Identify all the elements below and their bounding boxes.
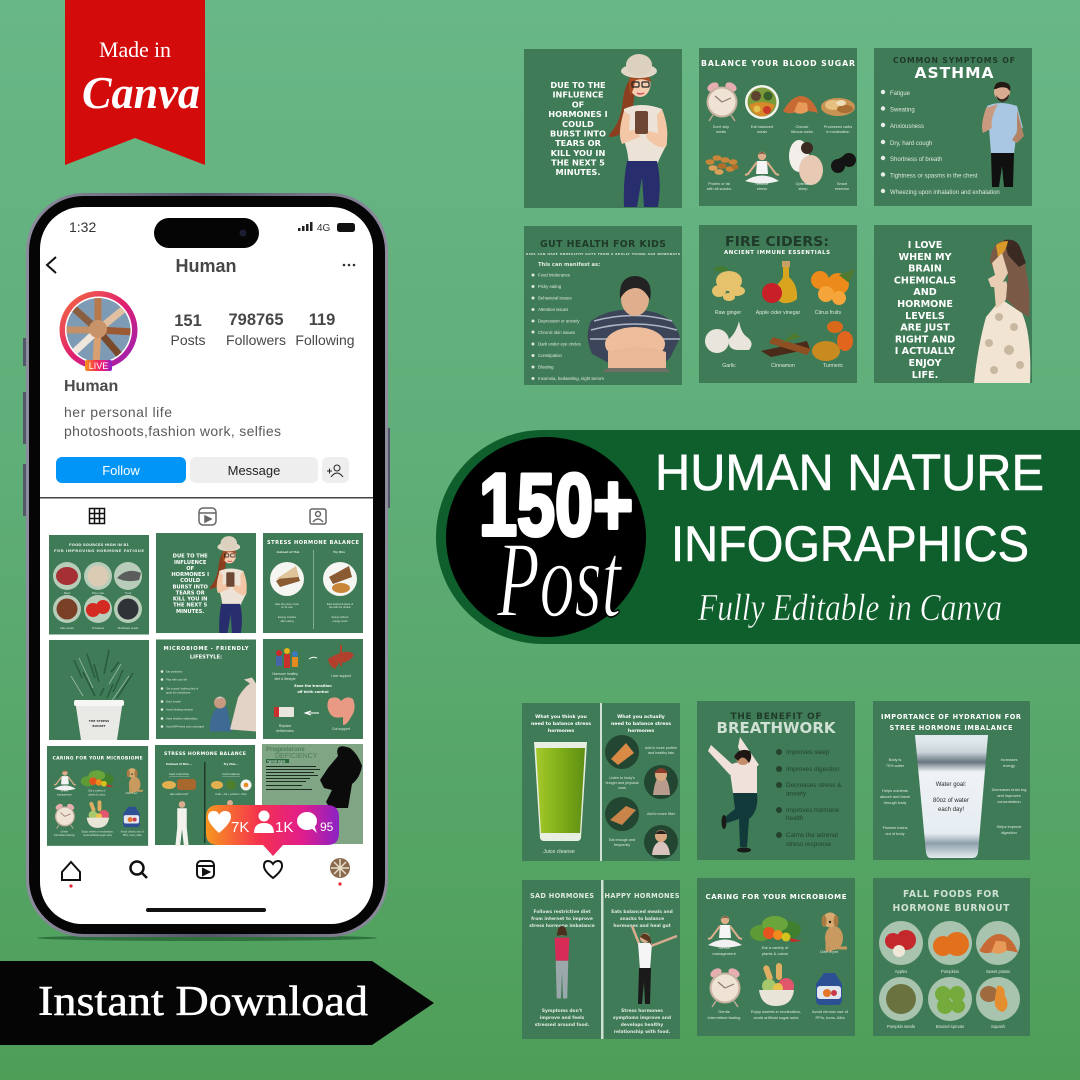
card: sad vs happy hormones: SAD HORMONES (530, 892, 594, 900)
card: sad vs happy hormones: HAPPY HORMONES (604, 892, 680, 900)
card: fire ciders: Apple cider vinegar (756, 310, 800, 316)
post: hormone healthy transition: Replace (279, 724, 291, 728)
instant download arrow (0, 961, 434, 1045)
card: symptoms of asthma: ASTHMA (914, 64, 994, 82)
post: caring for your microbiome: Eat a variety of (88, 788, 106, 792)
profile stats: Followers (226, 332, 286, 348)
post: food sources: Beef (64, 591, 70, 595)
card: caring for your microbiome: Avoid chronic use of (812, 1009, 849, 1014)
card: think vs actually need: Add in more fiber (647, 812, 676, 816)
post: food sources: Flax seeds (60, 626, 74, 630)
follow button: Follow (102, 463, 140, 478)
card: caring for your microbiome: plants & colors (762, 951, 788, 956)
post: hormones quote: OF (186, 566, 195, 572)
card: gut health for kids: KIDS CAN HAVE UNHEALTHY GUTS FROM A REALLY YOUNG AGE NOWADAYS (526, 252, 680, 256)
card: symptoms of asthma: Wheezing upon inhalation and exhalation (890, 190, 1000, 196)
card: balance your blood sugar: meals (716, 130, 726, 134)
post: progesterone deficiency: DEFICIENCY (275, 753, 318, 760)
post: progesterone deficiency (262, 744, 363, 844)
card: importance of hydration: IMPORTANCE OF HYDRATION FOR (881, 713, 1021, 721)
card: balance your blood sugar: BALANCE YOUR BLOOD SUGAR (701, 59, 855, 68)
card: think vs actually need: hormones (548, 728, 574, 734)
card: hormones quote: OF (572, 99, 584, 109)
stats bubble (206, 805, 339, 856)
card: gut health for kids: Dark under eye circles (538, 342, 581, 346)
post: caring for your microbiome: Enjoy sweets in moderation, (82, 829, 114, 833)
card: I love when my brain chemicals: ARE JUST (900, 323, 950, 334)
card: importance of hydration: out of body (885, 831, 905, 836)
heading (655, 444, 1044, 572)
post: food sources: Pine nuts (92, 591, 104, 595)
card: symptoms of asthma: Dry, hard cough (890, 141, 932, 147)
card: fire ciders: Garlic (722, 363, 736, 369)
card: hormones quote: KILL YOU IN (551, 148, 605, 158)
card: sad vs happy hormones: stressed around food. (535, 1022, 590, 1028)
card: think vs actually need: need to balance stress (611, 721, 671, 727)
post: caring for your microbiome: Gentle (61, 829, 69, 833)
post: stress hormone balance: energy crash (332, 619, 348, 623)
card: fall foods: Pumpkin seeds (887, 1024, 915, 1029)
stats bubble: 7K (231, 819, 249, 836)
card: caring for your microbiome: Enjoy sweets in moderation, (751, 1009, 801, 1014)
card: sad vs happy hormones: Stress hormones (621, 1008, 663, 1014)
card: I love when my brain chemicals: AND (913, 287, 937, 298)
badge: 150+ Post: Post (496, 521, 623, 640)
card: balance your blood sugar: with all snacks (707, 187, 731, 191)
card: think vs actually need: hunger and physical (605, 781, 639, 785)
card: fall foods (873, 878, 1030, 1036)
post: progesterone deficiency: Typical signs (267, 760, 286, 764)
post: microbiome friendly: Eat probiotics (166, 670, 183, 674)
add person button (322, 457, 349, 483)
post: hormones quote: DUE TO THE (173, 554, 208, 560)
card: fall foods: Brussel sprouts (936, 1024, 964, 1029)
card: importance of hydration: Water goal: (936, 782, 967, 788)
card: gut health for kids: Attention issues (538, 307, 568, 312)
heading: HUMAN NATURE (655, 444, 1044, 501)
post: hormone healthy transition: off birth control (297, 690, 329, 694)
post: hormones quote: BURST INTO (172, 584, 208, 590)
card: hormones quote: MINUTES. (556, 167, 600, 177)
card: fall foods: FALL FOODS FOR (903, 889, 999, 900)
card: I love when my brain chemicals: RIGHT AND (895, 334, 955, 345)
badge: 150+ Post: 150+ (479, 455, 633, 554)
post: hormone healthy transition: Liver support (331, 674, 351, 678)
post: hormones quote: INFLUENCE (174, 560, 207, 566)
post: stress hormone balance: STRESS HORMONE BALANCE (267, 540, 360, 546)
profile stats: Posts (170, 332, 206, 348)
post: stress hormone balance: Try this (333, 550, 345, 554)
card: benefit of breathwork: anxiety (786, 790, 807, 798)
post: caring for your microbiome: plants & colors (89, 792, 106, 796)
card: importance of hydration: concentration (997, 799, 1021, 804)
post: microbiome friendly: Avoid inhaling exhaust (166, 708, 193, 712)
status bar: 1:32 (69, 219, 96, 235)
profile header (47, 256, 355, 276)
card: symptoms of asthma: Sweating (890, 108, 915, 114)
card: balance your blood sugar: Smart (837, 182, 848, 186)
card: think vs actually need: hormones (628, 728, 654, 734)
post: food sources: Trout (125, 591, 131, 595)
post: stress hormone balance 2: Try this... (224, 762, 238, 766)
card: hormones quote: INFLUENCE (552, 90, 604, 100)
card: caring for your microbiome: Stress (718, 945, 730, 950)
card: benefit of breathwork (697, 701, 855, 860)
card: symptoms of asthma: COMMON SYMPTOMS OF (893, 56, 1015, 65)
card: importance of hydration: Decreases brain fog (992, 787, 1026, 792)
card: fall foods: Pumpkins (941, 969, 959, 974)
card: importance of hydration: Body is (889, 757, 901, 762)
home indicator (146, 908, 266, 912)
card: importance of hydration: Flushes toxins (883, 825, 907, 830)
card: symptoms of asthma: Tightness or spasms in the chest (890, 174, 978, 180)
card: importance of hydration: Helps nutrients (882, 788, 908, 793)
title banner (436, 430, 1080, 644)
card: balance your blood sugar: Choose (795, 125, 809, 129)
card: I love when my brain chemicals: WHEN MY (898, 252, 953, 263)
card: fire ciders: Turmeric (823, 363, 844, 369)
card: think vs actually need: cues (618, 786, 626, 790)
heading: INFOGRAPHICS (671, 516, 1029, 572)
card: think vs actually need: and healthy fats (648, 751, 674, 755)
card: benefit of breathwork: stress response (786, 841, 832, 848)
card: symptoms of asthma (874, 48, 1032, 206)
card: sad vs happy hormones: stress hormone imbalance (529, 923, 595, 929)
card: hormones quote: COULD (562, 119, 594, 129)
card: importance of hydration: each day! (938, 807, 964, 813)
card: think vs actually need: Listen to body's (609, 776, 635, 780)
post: microbiome friendly: Get a good, bathing dirty is (166, 686, 199, 690)
card: gut health for kids: Depression or anxiety (538, 318, 580, 324)
card: importance of hydration: STREE HORMONE IMBALANCE (890, 724, 1013, 732)
post: hormone healthy transition: Hormone healthy (272, 672, 298, 676)
card: importance of hydration: 80oz of water (933, 798, 969, 804)
post: stress hormone balance 2: Carb restriction (169, 772, 189, 776)
message button: Message (228, 463, 280, 478)
post: stress hormone balance: Instead of this (277, 550, 300, 554)
post: progesterone deficiency: Progesterone (266, 747, 305, 753)
profile bio (64, 378, 281, 439)
card: balance your blood sugar: Reduce (755, 182, 769, 186)
card: fire ciders: Cinnamon (771, 363, 795, 369)
card: fire ciders: ANCIENT IMMUNE ESSENTIALS (724, 250, 830, 256)
card: think vs actually need: What you actually (617, 714, 665, 720)
post: caring for your microbiome: management (57, 792, 72, 796)
card: I love when my brain chemicals: I ACTUALLY (895, 346, 956, 357)
post: stress hormone balance 2: Carb + fat + protein + fiber (215, 792, 247, 796)
card: fall foods: Squash (991, 1024, 1006, 1029)
profile bio: Human (64, 378, 118, 395)
card: I love when my brain chemicals: LEVELS (905, 311, 945, 322)
profile bio: her personal life (64, 404, 172, 420)
card: importance of hydration: Increases (1001, 757, 1017, 762)
ribbon: Made in Canva: Canva (82, 68, 200, 118)
post: food sources: FOOD SOURCES HIGH IN B1 (69, 542, 129, 547)
follow button (56, 457, 186, 483)
post: stress bucket: BUCKET (92, 724, 107, 728)
profile stats: 798765 (228, 311, 284, 329)
profile stats: 119 (309, 311, 335, 329)
card: benefit of breathwork: BREATHWORK (716, 719, 837, 737)
post: microbiome friendly: Have healthy relationships (166, 716, 198, 720)
post: hormone healthy transition (263, 639, 363, 739)
card: caring for your microbiome: management (712, 951, 737, 956)
card: hormones quote: TEARS OR (555, 138, 602, 148)
card: balance your blood sugar: sleep (798, 187, 808, 191)
card: sad vs happy hormones: relationship with food. (614, 1029, 671, 1035)
card: fire ciders: Raw ginger (715, 310, 741, 316)
card: hormones quote: THE NEXT 5 (551, 158, 605, 168)
card: think vs actually need: Eat enough and (609, 838, 635, 842)
stats bubble: 1K (275, 819, 293, 836)
card: I love when my brain chemicals: CHEMICALS (894, 275, 956, 286)
post: hormone healthy transition: diet & lifestyle (275, 677, 296, 681)
card: sad vs happy hormones: symptoms improve and (613, 1015, 671, 1021)
card: gut health for kids: Behavioral issues (538, 296, 572, 300)
card: importance of hydration: absorb and travel (880, 794, 910, 799)
card: think vs actually need: need to balance stress (531, 721, 591, 727)
card: symptoms of asthma: Shortness of breath (890, 157, 942, 163)
card: fire ciders (699, 225, 857, 383)
card: I love when my brain chemicals: LIFE. (912, 370, 938, 381)
card: caring for your microbiome: avoid artificial sugar subs (754, 1015, 798, 1020)
card: caring for your microbiome: CARING FOR YOUR MICROBIOME (706, 893, 847, 901)
card: balance your blood sugar (699, 48, 857, 206)
card: balance your blood sugar: meals (757, 130, 767, 134)
card: hormones quote: DUE TO THE (550, 80, 606, 90)
post: caring for your microbiome: intermittent fasting (54, 833, 75, 837)
post: caring for your microbiome: Stress (61, 788, 69, 792)
panel: top preview cards (524, 48, 1032, 385)
card: gut health for kids: Picky eating (538, 284, 562, 289)
card: I love when my brain chemicals: ENJOY (909, 358, 943, 369)
card: importance of hydration: and improves (997, 793, 1021, 798)
post: stress hormone balance: after eating (281, 619, 294, 623)
card: gut health for kids: This can manifest as: (538, 262, 600, 268)
card: I love when my brain chemicals: I LOVE (908, 240, 942, 251)
card: gut health for kids: Insomnia, bedwetting, night terrors (538, 376, 604, 381)
post: hormones quote: HORMONES I (171, 572, 209, 578)
subheading: Fully Editable in Canva (697, 587, 1002, 629)
post: stress hormone balance: Eats dry piece of pie (275, 602, 299, 606)
card: fire ciders: FIRE CIDERS: (725, 235, 829, 250)
profile bio: photoshoots,fashion work, selfies (64, 423, 281, 439)
post: microbiome friendly: Don't smoke (166, 700, 181, 704)
card: importance of hydration (873, 701, 1030, 860)
post: stress hormone balance: Eats preferred piece of (327, 602, 353, 606)
card: fall foods: HORMONE BURNOUT (892, 903, 1010, 914)
post: microbiome friendly: Avoid BPA-lined cans and paper (166, 724, 205, 728)
post: food sources: FOR IMPROVING HORMONE FATIGUE (54, 548, 144, 553)
post: stress hormone balance 2: Has carbs lost? (170, 792, 189, 796)
card: sad vs happy hormones: Follows restrictive diet (534, 909, 590, 915)
tab icons (90, 508, 326, 525)
post: microbiome friendly: MICROBIOME - FRIENDLY (164, 646, 249, 652)
card: hormones quote (524, 49, 682, 208)
post: caring for your microbiome: Own a pet (126, 791, 138, 795)
post: hormones quote: TEARS OR (176, 590, 205, 596)
phone mockup (23, 193, 390, 941)
card: benefit of breathwork: Improves digestion (786, 766, 840, 773)
card: sad vs happy hormones: snacks to balance (620, 916, 664, 922)
card: caring for your microbiome: intermittent fasting (708, 1015, 740, 1020)
status bar (69, 218, 355, 248)
card: caring for your microbiome: Eat a variety of (762, 945, 789, 950)
card: sad vs happy hormones: Eats balanced meals and (611, 909, 673, 915)
card: balance your blood sugar: Eat balanced (751, 125, 773, 129)
card: fall foods: Apples (895, 969, 907, 974)
post: stress hormone balance: Enjoys without (332, 615, 349, 619)
card: benefit of breathwork: Calms the adrenal (786, 832, 838, 839)
card: balance your blood sugar: Protein or fat (708, 182, 731, 186)
post: stress bucket: THE STRESS (89, 719, 109, 723)
post: stress hormone balance 2: Instead of this... (166, 762, 192, 766)
post: hormones quote: COULD (180, 578, 201, 584)
post: stress hormone balance 2 (155, 745, 255, 846)
post: hormones quote (156, 533, 256, 633)
card: balance your blood sugar: in moderation (826, 130, 850, 134)
card: balance your blood sugar: stress (757, 187, 767, 191)
card: balance your blood sugar: Don't skip (713, 125, 729, 129)
avatar with live badge: LIVE (89, 361, 108, 371)
post: stress hormone balance: pie with the protein (329, 605, 351, 609)
card: benefit of breathwork: Improves hormone (786, 807, 840, 814)
card: fire ciders: Citrus fruits (815, 310, 842, 316)
ribbon: Made in Canva: Made in (99, 37, 171, 62)
card: think vs actually need: Juice cleanse (543, 849, 575, 855)
card: I love when my brain chemicals: HORMONE (897, 299, 953, 310)
post: hormone healthy transition: Ease the transition (294, 684, 332, 688)
card: gut health for kids: Constipation (538, 353, 562, 358)
card: symptoms of asthma: Anxiousness (890, 124, 924, 130)
card: gut health for kids: Chronic skin issues (538, 330, 575, 335)
card: I love when my brain chemicals (874, 225, 1032, 383)
post: hormones quote: THE NEXT 5 (173, 603, 208, 609)
status bar: 4G (317, 223, 331, 234)
post: microbiome friendly: Play with your dirt (166, 678, 187, 682)
card: importance of hydration: through body (884, 800, 906, 805)
panel: bottom preview cards (522, 701, 1030, 1039)
profile stats (170, 311, 355, 348)
post: hormones quote: MINUTES. (176, 609, 204, 615)
profile header: Human (175, 256, 237, 276)
post: caring for your microbiome: Avoid chronic use of (121, 829, 144, 833)
card: think vs actually need: What you think you (535, 714, 587, 720)
card: sad vs happy hormones: hormones and heal gut (613, 923, 671, 929)
post: food sources: Tomatoes (92, 626, 105, 630)
post: hormone healthy transition: deficiencies (276, 729, 294, 733)
post: caring for your microbiome: CARING FOR YOUR MICROBIOME (52, 755, 143, 761)
card: balance your blood sugar: exercise (835, 187, 849, 191)
card: benefit of breathwork: THE BENEFIT OF (730, 712, 822, 722)
card: caring for your microbiome (697, 878, 855, 1036)
card: hormones quote: BURST INTO (550, 128, 606, 138)
card: benefit of breathwork: Improves sleep (786, 749, 830, 756)
avatar with live badge (60, 291, 138, 371)
stats bubble: 95 (320, 820, 334, 834)
post: stress hormone balance 2: Carb balance (222, 772, 240, 776)
post: caring for your microbiome: avoid artificial sugar subs (83, 833, 113, 837)
ribbon: Made in Canva (65, 0, 205, 165)
card: benefit of breathwork: health (786, 815, 804, 822)
post: stress hormone balance: Energy crashes (278, 615, 297, 619)
card: caring for your microbiome: PPIs, tums, Alka (815, 1015, 845, 1020)
card: importance of hydration: energy (1003, 763, 1015, 768)
card: sad vs happy hormones: improve and feels (540, 1015, 585, 1021)
card: caring for your microbiome: Gentle (718, 1009, 731, 1014)
post: microbiome friendly (156, 640, 256, 739)
card: sad vs happy hormones: Symptoms don't (542, 1008, 582, 1014)
post: stress bucket (49, 640, 149, 740)
instant download arrow: Instant Download (38, 979, 368, 1025)
post: microbiome friendly: good for microbiome (166, 690, 191, 694)
card: gut health for kids (524, 226, 682, 385)
card: importance of hydration: Helps improve (997, 824, 1021, 829)
post: stress hormone balance (263, 533, 363, 633)
card: gut health for kids: Food intolerance (538, 272, 571, 278)
card: balance your blood sugar: Optimize (796, 182, 810, 186)
card: think vs actually need: Add in more protein (645, 746, 677, 750)
post: stress hormone balance: on its own (281, 605, 293, 609)
card: fall foods: Sweet potato (986, 969, 1011, 974)
badge: 150+ Post (446, 437, 646, 640)
message button (190, 457, 318, 483)
card: sad vs happy hormones: develops healthy (621, 1022, 663, 1028)
card: caring for your microbiome: Own a pet (820, 949, 839, 954)
card: hormones quote: HORMONES I (548, 109, 608, 119)
post: caring for your microbiome: PPIs, tums, Alka (123, 833, 142, 837)
card: balance your blood sugar: fibrous carbs (791, 130, 813, 134)
card: I love when my brain chemicals: BRAIN (908, 264, 942, 275)
post: food sources: Sunflower seeds (118, 626, 139, 630)
post: caring for your microbiome (47, 746, 148, 846)
post: hormones quote: KILL YOU IN (173, 597, 208, 603)
banner background (436, 430, 1080, 644)
card: think vs actually need (522, 703, 680, 861)
card: balance your blood sugar: Processed carbs (824, 125, 852, 129)
card: symptoms of asthma: Fatigue (890, 91, 911, 97)
post: stress hormone balance 2: STRESS HORMONE BALANCE (164, 751, 246, 757)
card: importance of hydration: 70% water (886, 763, 905, 768)
card: gut health for kids: Bloating (538, 364, 554, 370)
profile stats: 151 (174, 312, 202, 330)
card: importance of hydration: digestion (1001, 830, 1017, 835)
card: sad vs happy hormones (522, 880, 680, 1039)
profile stats: Following (295, 332, 355, 348)
post: microbiome friendly: LIFESTYLE: (190, 654, 222, 660)
card: gut health for kids: GUT HEALTH FOR KIDS (540, 239, 666, 250)
post: food sources (49, 535, 149, 634)
post: hormone healthy transition: Gut support (332, 727, 350, 731)
card: sad vs happy hormones: from internet to improve (531, 916, 593, 922)
card: think vs actually need: frequently (614, 843, 630, 847)
card: benefit of breathwork: Decreases stress & (786, 782, 842, 789)
bottom navigation (62, 858, 350, 888)
